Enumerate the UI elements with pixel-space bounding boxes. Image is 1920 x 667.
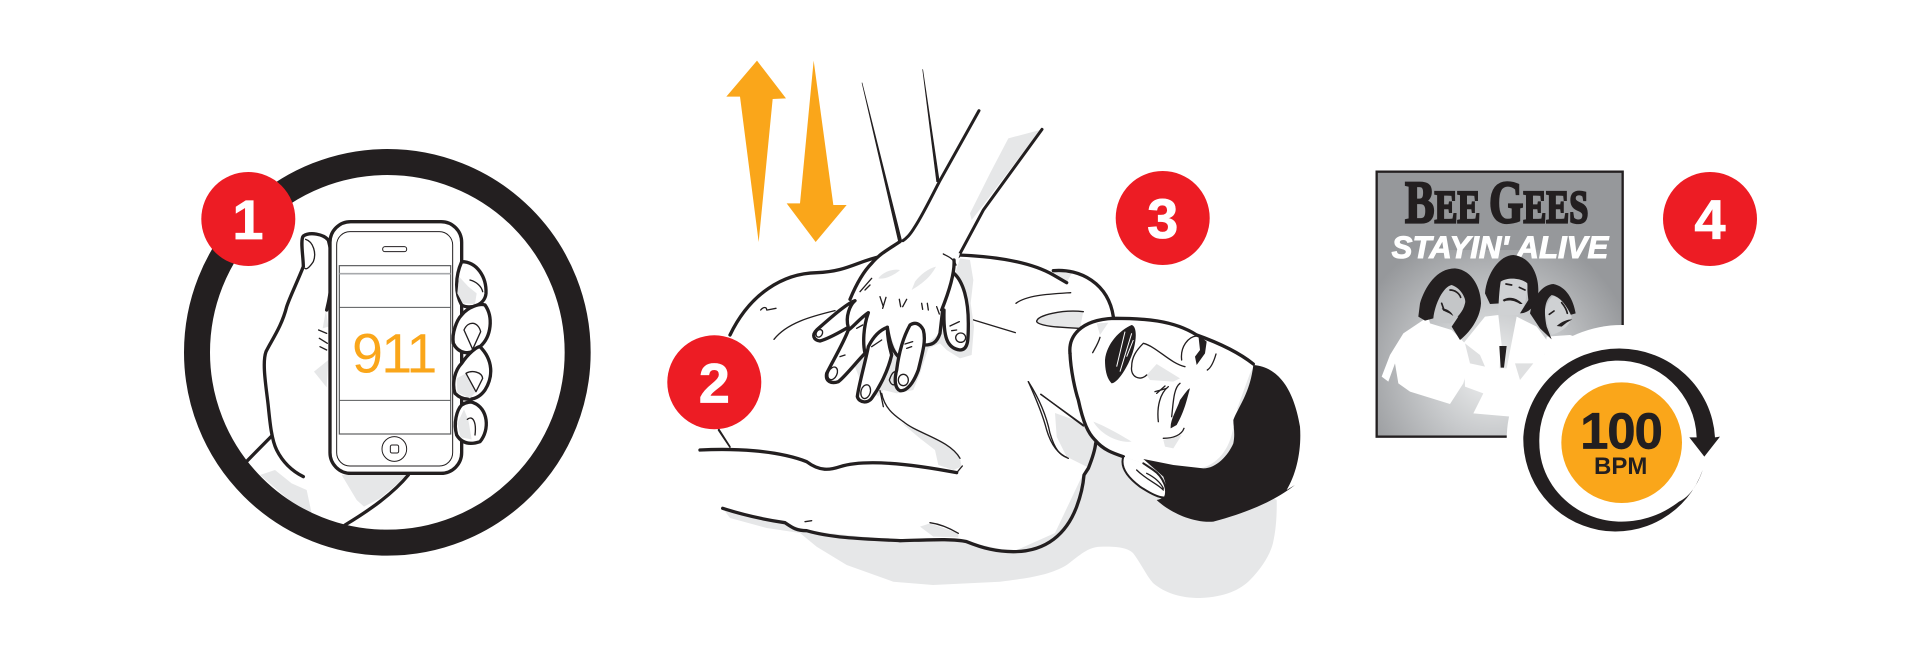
icon: holding hand (247, 234, 408, 525)
icon: fingers wrapping phone (453, 262, 491, 443)
patient lower torso (700, 393, 1096, 552)
badge 4 (1663, 172, 1757, 266)
sleeve shadows (260, 470, 408, 513)
badge 2 (667, 335, 761, 429)
bpm value: 100 (1580, 402, 1662, 459)
arm shadow (970, 130, 1040, 220)
badge 3 (1116, 171, 1210, 265)
face details (1028, 336, 1216, 458)
tempo mask (1507, 325, 1737, 555)
band name: BEE GEES (1405, 170, 1588, 236)
panel 4: song tempo (1377, 170, 1737, 555)
hair (1143, 365, 1300, 522)
phone number: 911 (352, 323, 436, 385)
panel 2: compressions (718, 61, 1113, 457)
icon: compressing hand (814, 242, 968, 407)
tempo dial (1523, 349, 1720, 531)
arrow: circular (1523, 349, 1720, 531)
icon: smartphone (330, 222, 462, 473)
song title: STAYIN' ALIVE (1392, 230, 1609, 265)
panel 1: phone call to 911 (197, 162, 578, 543)
badge 3: 3 (1147, 187, 1178, 250)
patient head (1028, 318, 1300, 522)
rescuer arms (862, 69, 1042, 257)
patient chest outline (718, 255, 1113, 457)
head fill and outline (1070, 318, 1253, 473)
band figures (1382, 255, 1603, 420)
panel 2: body shadow (723, 413, 1277, 598)
arrow: down (787, 61, 847, 242)
badge 2: 2 (699, 352, 730, 414)
album cover (1377, 170, 1623, 437)
ear (1122, 457, 1166, 497)
bpm disc (1561, 382, 1682, 503)
arrow: up (726, 61, 786, 242)
badge 4: 4 (1694, 188, 1726, 251)
bpm label: BPM (1594, 453, 1647, 480)
closed eye (1105, 325, 1136, 383)
badge 1: 1 (232, 188, 264, 251)
badge 1 (201, 172, 295, 266)
hand shadow (855, 258, 974, 397)
ring (197, 162, 578, 543)
